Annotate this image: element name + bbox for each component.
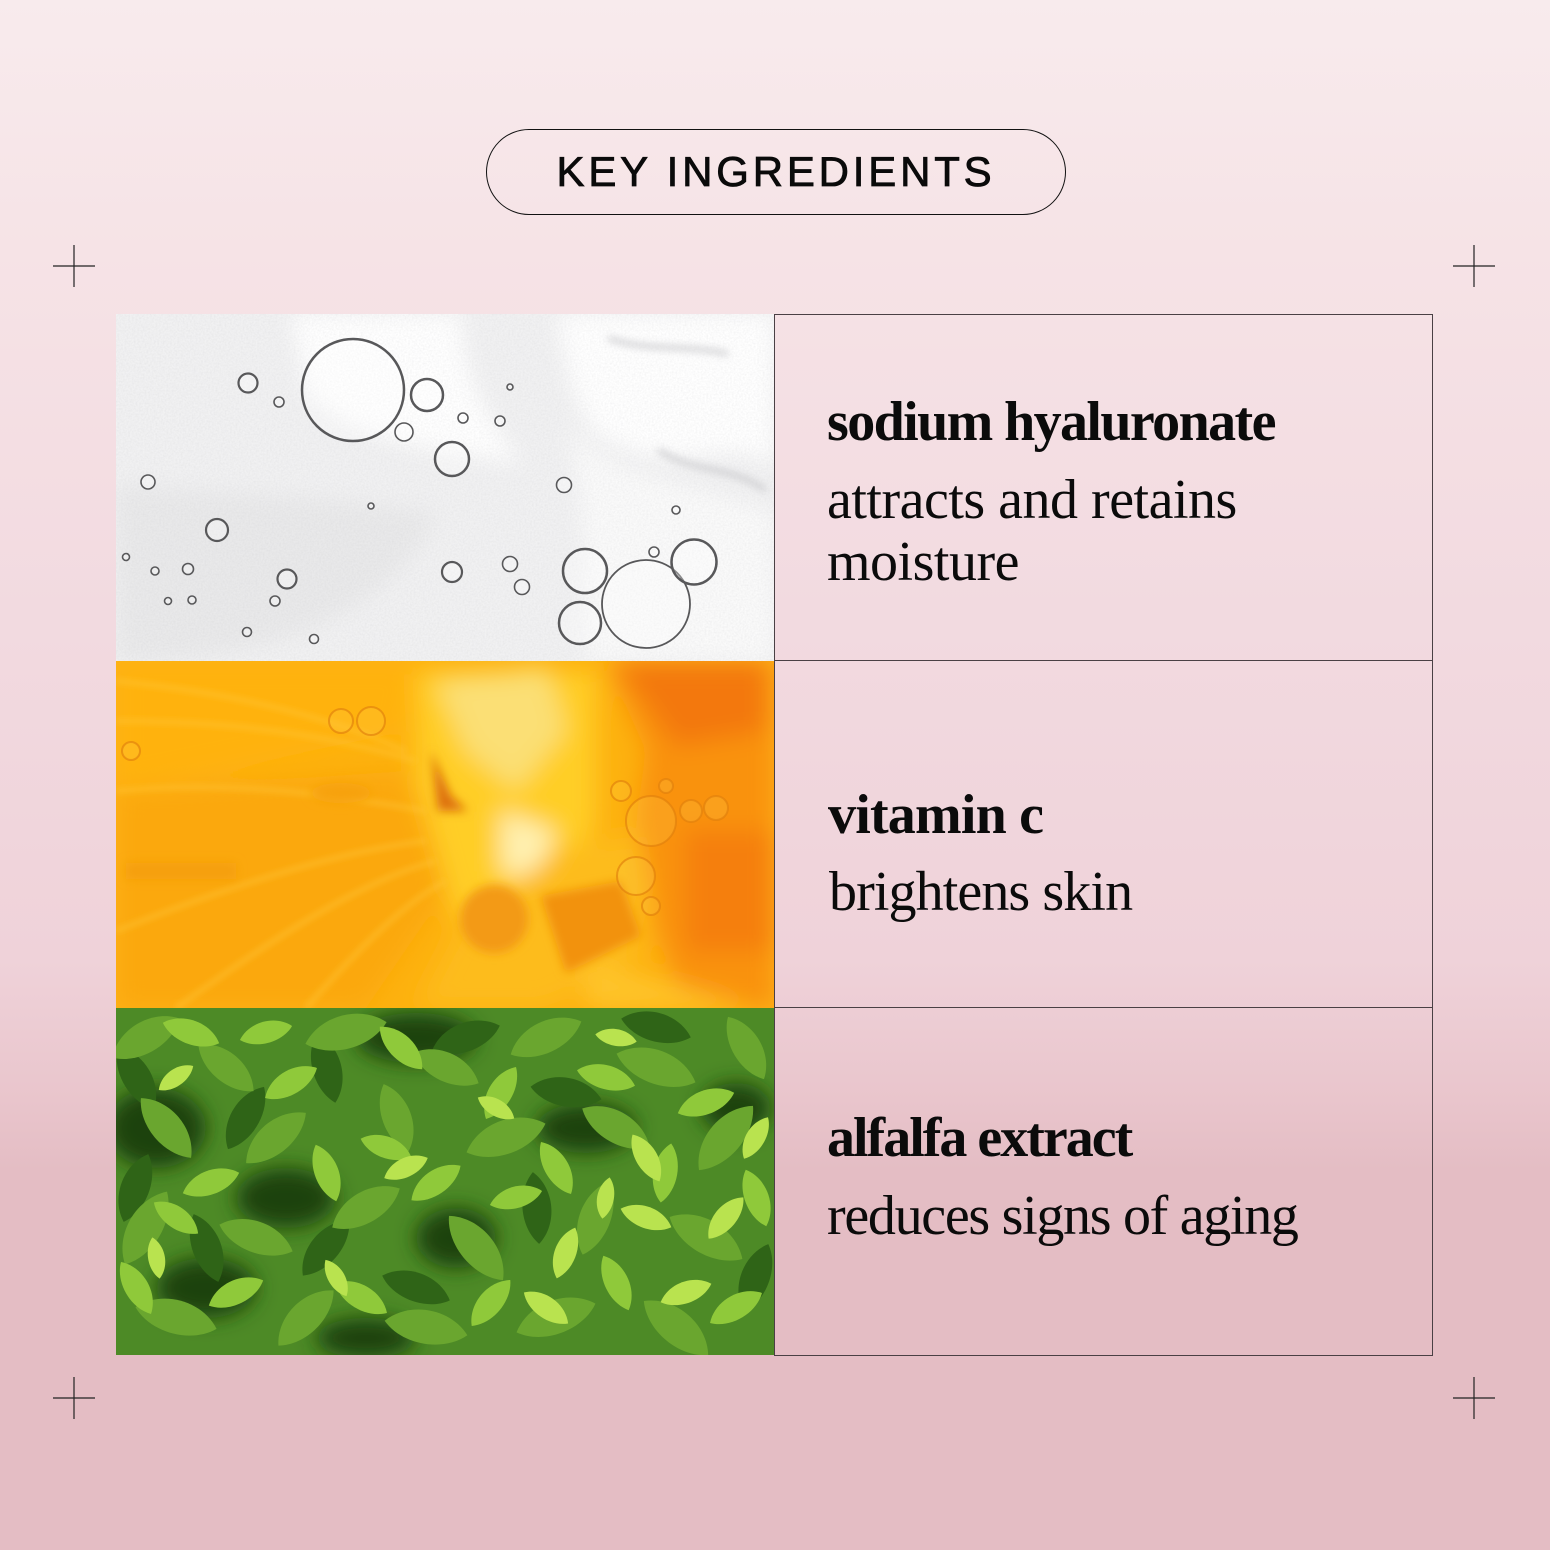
panel: alfalfa extract [774,1007,1433,1356]
ingredient name: alfalfa extract [827,1107,1131,1169]
ingredient benefit: attracts and retains [827,469,1237,531]
heading pill: key ingredients: KEY INGREDIENTS [556,148,995,195]
corner mark bottom right [1453,1377,1495,1419]
panel: sodium hyaluronate [774,314,1433,661]
corner mark top left [53,245,95,287]
ingredient name: sodium hyaluronate [827,391,1275,453]
heading pill: key ingredients [486,129,1066,215]
image: green alfalfa leaves [116,1008,774,1355]
ingredient benefit: brightens skin [829,861,1132,923]
ingredient benefit [827,469,1237,593]
corner mark bottom left [53,1377,95,1419]
image: gel with bubbles [116,314,774,661]
panel: vitamin c [774,660,1433,1008]
ingredient name: vitamin c [828,784,1043,846]
corner mark top right [1453,245,1495,287]
ingredient benefit: reduces signs of aging [827,1185,1298,1247]
ingredient benefit: moisture [827,531,1019,593]
image: orange citrus pulp [116,661,774,1008]
